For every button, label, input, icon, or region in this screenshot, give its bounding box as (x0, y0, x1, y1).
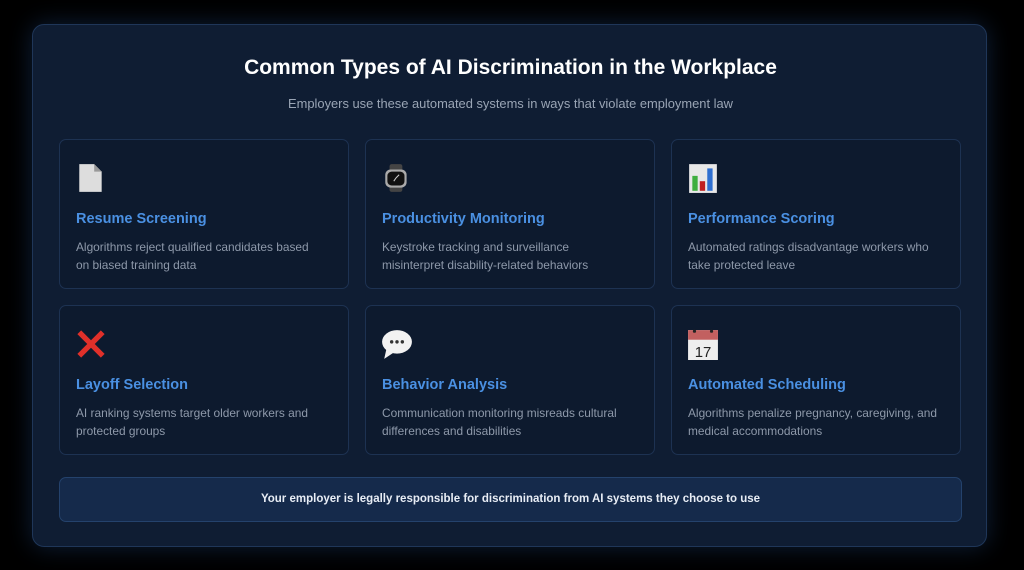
card: performance scoring: Performance Scoring (688, 211, 835, 227)
card: layoff selection: Layoff Selection (76, 377, 188, 393)
card: automated scheduling: medical accommodations (688, 424, 822, 438)
card: performance scoring: take protected leave (688, 258, 795, 272)
card: performance scoring (671, 139, 961, 289)
card: layoff selection: protected groups (76, 424, 165, 438)
card: productivity monitoring: Keystroke tracking and surveillance (382, 240, 569, 254)
footer banner: Your employer is legally responsible for discrimination from AI systems they choose to use (261, 493, 760, 505)
title: Common Types of AI Discrimination in the Workplace (244, 56, 777, 79)
card: layoff selection (59, 305, 349, 455)
subtitle: Employers use these automated systems in ways that violate employment law (288, 96, 733, 111)
icon: red x (77, 330, 105, 358)
icon: calendar (688, 330, 718, 360)
card: productivity monitoring: Productivity Monitoring (382, 211, 545, 227)
icon: document (79, 164, 102, 192)
icon: bar chart (689, 164, 717, 193)
card: resume screening (59, 139, 349, 289)
icon: watch (385, 164, 407, 192)
card: automated scheduling (671, 305, 961, 455)
card: automated scheduling: Algorithms penalize pregnancy, caregiving, and (688, 406, 937, 420)
card: behavior analysis: Communication monitoring misreads cultural (382, 406, 617, 420)
footer banner (59, 477, 962, 522)
card: performance scoring: Automated ratings disadvantage workers who (688, 240, 929, 254)
card: behavior analysis: differences and disabilities (382, 424, 521, 438)
card: resume screening: on biased training data (76, 258, 196, 272)
card: resume screening: Algorithms reject qualified candidates based (76, 240, 309, 254)
card: behavior analysis: Behavior Analysis (382, 377, 507, 393)
card: resume screening: Resume Screening (76, 211, 207, 227)
card: layoff selection: AI ranking systems target older workers and (76, 406, 308, 420)
icon: speech bubble (382, 330, 412, 359)
card: productivity monitoring (365, 139, 655, 289)
card: productivity monitoring: misinterpret disability-related behaviors (382, 258, 588, 272)
card: behavior analysis (365, 305, 655, 455)
card: automated scheduling: Automated Scheduling (688, 377, 846, 393)
